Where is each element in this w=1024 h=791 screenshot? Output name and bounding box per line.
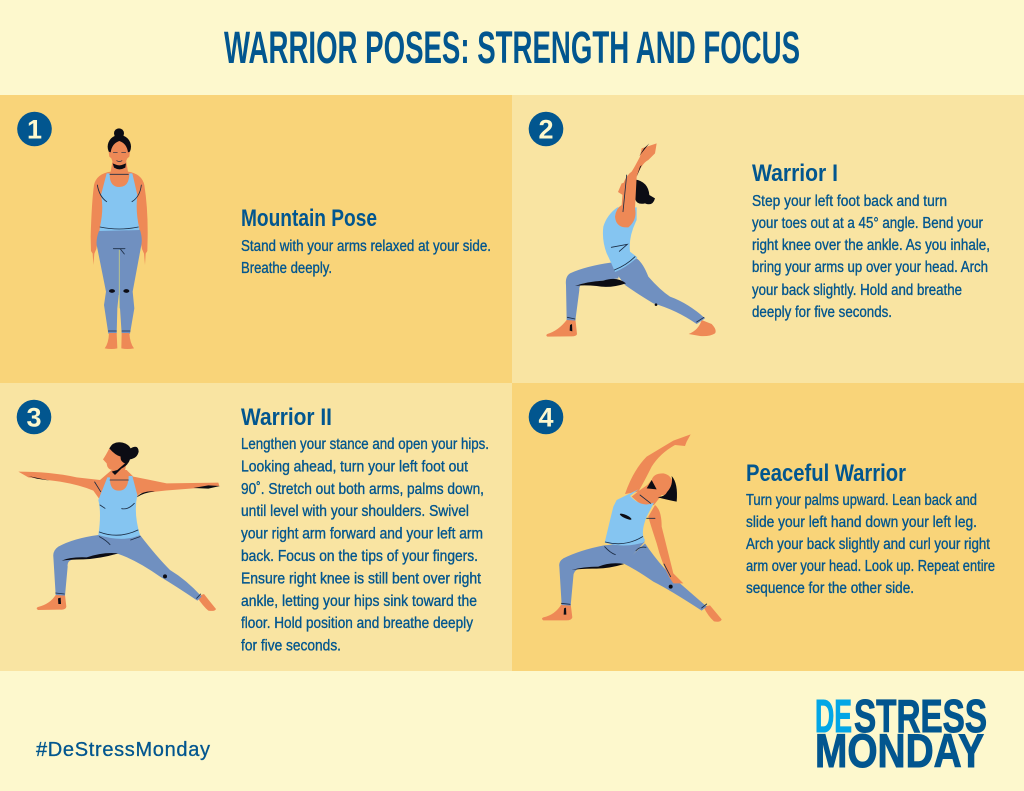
number badge 1: 1 [27,114,42,144]
description: Lengthen your stance and open your hips. [241,436,489,453]
logo: DeStress Monday [815,690,987,777]
figure: mountain pose [91,128,148,349]
panel: warrior II [0,383,512,671]
number badge 4 [529,400,563,434]
panel: mountain pose [0,95,512,383]
description: Breathe deeply. [241,260,332,277]
description: 90˚. Stretch out both arms, palms down, [241,481,484,498]
number badge 2: 2 [538,114,554,144]
description: slide your left hand down your left leg. [746,514,977,531]
panel: peaceful warrior [512,383,1024,671]
description: bring your arms up over your head. Arch [752,259,988,276]
description: Turn your palms upward. Lean back and [746,492,977,509]
number badge 2 [529,112,563,146]
description: your back slightly. Hold and breathe [752,282,962,299]
pose name: Mountain Pose [241,205,377,232]
figure: warrior I [546,143,716,337]
hashtag: #DeStressMonday [36,739,210,761]
description: deeply for five seconds. [752,304,892,321]
figure: peaceful warrior [542,434,722,622]
description [241,238,491,277]
description [746,492,995,597]
description: Looking ahead, turn your left foot out [241,458,469,476]
logo: DeStress Monday: MONDAY [815,724,984,777]
number badge 4: 4 [538,402,554,432]
number badge 3: 3 [26,402,42,432]
description: your right arm forward and your left arm [241,526,483,542]
pose name: Warrior I [752,160,838,187]
description: until level with your shoulders. Swivel [241,503,469,520]
pose name: Peaceful Warrior [746,460,906,487]
description: back. Focus on the tips of your fingers. [241,548,478,565]
description: your toes out at a 45° angle. Bend your [752,215,983,232]
description: right knee over the ankle. As you inhale, [752,237,990,254]
description: for five seconds. [241,638,341,654]
figure: warrior II [18,442,220,611]
description: Arch your back slightly and curl your right [746,536,991,553]
number badge 3 [17,400,51,434]
number badge 1 [17,112,52,146]
description: Ensure right knee is still bent over right [241,570,482,588]
panel: warrior I [512,95,1024,383]
description: Stand with your arms relaxed at your side. [241,238,491,255]
description [752,193,990,321]
description: Step your left foot back and turn [752,193,947,210]
description [241,436,489,654]
description: ankle, letting your hips sink toward the [241,593,477,610]
logo: DeStress Monday: DE [815,690,852,742]
pose name: Warrior II [241,404,332,431]
description: sequence for the other side. [746,580,914,597]
description: floor. Hold position and breathe deeply [241,615,473,632]
